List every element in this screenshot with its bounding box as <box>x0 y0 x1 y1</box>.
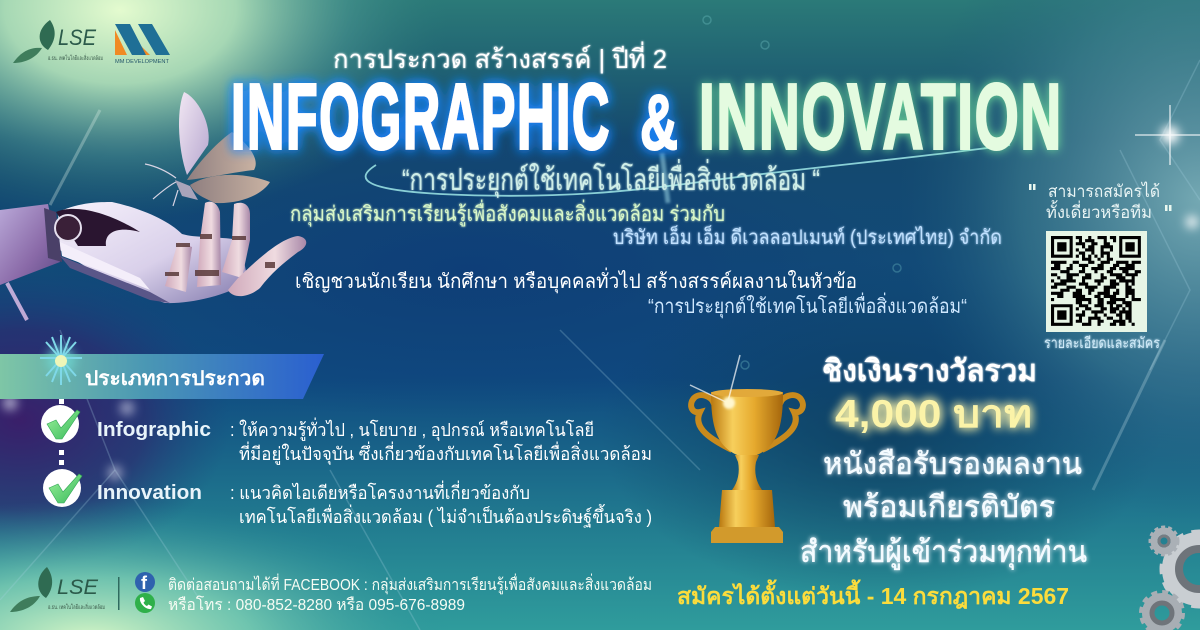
icon: facebook <box>135 572 155 593</box>
label: Innovation: Innovation <box>97 482 202 504</box>
butterfly <box>145 92 270 206</box>
prize heading: ชิงเงินรางวัลรวม <box>822 355 1037 388</box>
QR code <box>1046 231 1147 332</box>
logo: MM Development <box>115 24 170 65</box>
banner <box>0 354 324 399</box>
banner heading: ประเภทการประกวด <box>85 368 265 390</box>
organiser line: กลุ่มส่งเสริมการเรียนรู้เพื่อสังคมและสิ่งแวดล้อม ร่วมกับ <box>290 199 725 227</box>
connector dots <box>59 399 64 465</box>
logo: LSE top: อ.ธน. เทคโนโลยีและสิ่งแวดล้อม <box>48 54 103 62</box>
title: INFOGRAPHIC &: & <box>640 78 678 166</box>
QR caption: รายละเอียดและสมัคร <box>1044 335 1160 352</box>
title: INFOGRAPHIC & <box>231 64 678 168</box>
description: Infographic: ที่มีอยู่ในปัจจุบัน ซึ่งเกี่ยวข้องกับเทคโนโลยีเพื่อสิ่งแวดล้อม <box>239 441 652 465</box>
sparkle <box>40 335 82 385</box>
partner line: บริษัท เอ็ม เอ็ม ดีเวลลอปเมนท์ (ประเทศไทย) จำกัด <box>613 224 1002 249</box>
logo: LSE top <box>13 20 103 63</box>
subtitle: การประกวด สร้างสรรค์ | ปีที่ 2 <box>333 41 667 74</box>
icon: check innovation <box>43 469 82 507</box>
certificates text: หนังสือรับรองผลงาน <box>823 448 1082 481</box>
logo: LSE footer: อ.ธน. เทคโนโลยีและสิ่งแวดล้อม <box>48 603 105 611</box>
finger: middle <box>197 202 221 287</box>
description: Innovation: : แนวคิดไอเดียหรือโครงงานที่เกี่ยวข้องกับ <box>230 480 530 503</box>
invitation text: “การประยุกต์ใช้เทคโนโลยีเพื่อสิ่งแวดล้อม“ <box>648 292 967 319</box>
finger: outstretched <box>228 236 306 296</box>
logo: LSE footer: LSE <box>57 576 99 599</box>
footer divider <box>118 577 120 610</box>
certificates text: พร้อมเกียรติบัตร <box>843 491 1055 524</box>
finger: index <box>222 203 250 278</box>
logo: LSE footer <box>10 567 105 612</box>
prize amount: 4,000 บาท <box>835 393 1032 436</box>
deadline: สมัครได้ตั้งแต่วันนี้ - 14 กรกฎาคม 2567 <box>677 579 1069 609</box>
description: Innovation: เทคโนโลยีเพื่อสิ่งแวดล้อม ( ไม่จำเป็นต้องประดิษฐ์ขึ้นจริง ) <box>239 504 652 528</box>
certificates text <box>800 448 1087 571</box>
registration note: สามารถสมัครได้ <box>1048 181 1160 201</box>
icon: gears <box>1141 527 1200 630</box>
theme quote: “การประยุกต์ใช้เทคโนโลยีเพื่อสิ่งแวดล้อม “ <box>402 159 820 199</box>
description: Infographic: : ให้ความรู้ทั่วไป , นโยบาย , อุปกรณ์ หรือเทคโนโลยี <box>230 417 594 441</box>
logo: LSE top: LSE <box>58 25 96 50</box>
invitation text <box>295 267 967 319</box>
panel: contest types <box>0 335 652 528</box>
description: Infographic <box>230 417 652 465</box>
title: INFOGRAPHIC &: INFOGRAPHIC <box>231 64 611 168</box>
swirl line behind quote <box>366 145 1010 196</box>
registration note <box>1029 181 1172 222</box>
icon: trophy <box>690 355 803 543</box>
finger: ring <box>165 242 192 292</box>
description: Innovation <box>230 480 652 528</box>
robot hand <box>0 202 306 303</box>
icon: check infographic <box>41 405 80 443</box>
icon: phone <box>135 593 155 613</box>
contact text: ติดต่อสอบถามได้ที่ FACEBOOK : กลุ่มส่งเสริมการเรียนรู้เพื่อสังคมและสิ่งแวดล้อม <box>168 573 652 595</box>
label: Infographic: Infographic <box>97 419 211 441</box>
invitation text: เชิญชวนนักเรียน นักศึกษา หรือบุคคลทั่วไป สร้างสรรค์ผลงานในหัวข้อ <box>295 267 857 294</box>
logo: MM Development: MM DEVELOPMENT <box>115 59 170 65</box>
registration note: ทั้งเดี่ยวหรือทีม <box>1046 200 1152 222</box>
certificates text: สำหรับผู้เข้าร่วมทุกท่าน <box>800 536 1087 571</box>
contact text <box>168 573 652 614</box>
icon: facebook: f <box>141 573 148 593</box>
contact text: หรือโทร : 080-852-8280 หรือ 095-676-8989 <box>168 595 465 614</box>
